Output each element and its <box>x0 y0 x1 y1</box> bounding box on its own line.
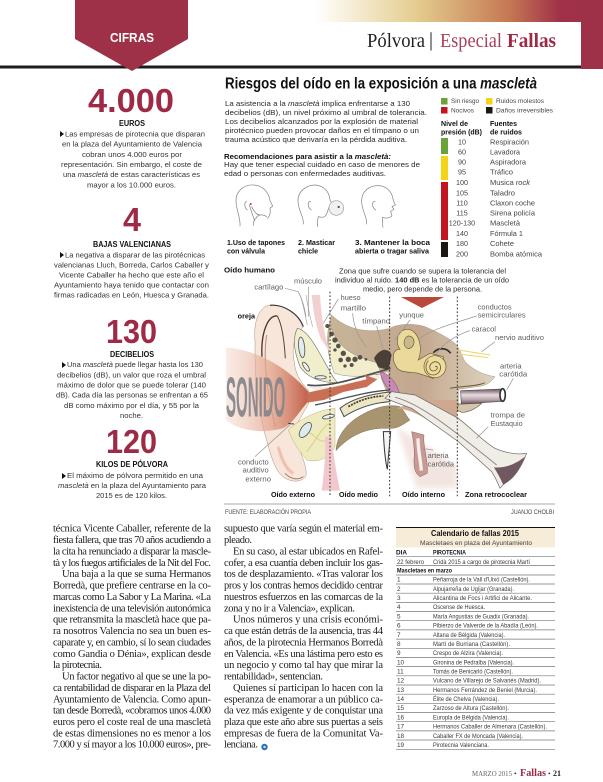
legend: Nocivos <box>451 108 475 114</box>
page footer: MARZO 2015 <box>472 769 512 778</box>
table day column: 10 <box>397 659 405 666</box>
table day column: 5 <box>397 613 401 620</box>
article column 2: lenciana. <box>224 740 258 751</box>
table header row: DIA <box>396 551 408 557</box>
article column 2: zona y no ir a Valencia», explican. <box>224 603 355 614</box>
figure: 4.000 euros: una mascletà de estas características es <box>63 170 200 179</box>
table day column: 2 <box>397 586 401 593</box>
table: noise levels: Lavadora <box>490 148 520 156</box>
table rules <box>396 556 555 749</box>
table day column: 6 <box>397 623 401 630</box>
page footer: • <box>514 769 517 778</box>
figure: 4.000 euros: mayor a los 10.000 euros. <box>87 180 176 190</box>
article column 1: caparate y, en cambio, sí lo sean ciudades <box>53 637 211 648</box>
article column 1: tan desde Borredà, «cobramos unos 4.000 <box>53 706 211 717</box>
recommendations text <box>224 152 420 178</box>
anatomy labels: caracol <box>472 324 496 333</box>
figure: 120 kilos de pólvora: El máximo de pólvora permitido en una <box>67 471 204 480</box>
section tab: cifras <box>75 0 188 71</box>
captions for the three recommendations <box>227 238 431 256</box>
figure: 130 decibelios: DECIBELIOS <box>110 350 155 359</box>
eustachian tube <box>385 392 527 488</box>
captions for the three recommendations: chicle <box>298 246 318 256</box>
note: tolerance zone: individuo al ruido. 140 dB es la tolerancia de un oído <box>335 275 509 284</box>
table: noise levels: Cohete <box>490 239 514 248</box>
anatomy labels: yunque <box>399 310 424 319</box>
illustration: human ear cross-section <box>226 276 544 497</box>
table company column: Élite de Chelva (Valencia). <box>433 694 499 703</box>
table company column: Alicantina de Focs i Artifici de Alicante. <box>433 595 532 602</box>
table heading: Mascletaes en plaza del Ayuntamiento <box>420 540 532 547</box>
zone labels: Oído externo <box>271 490 315 499</box>
table company column: Oscense de Huesca. <box>433 604 485 611</box>
article column 1: Un factor negativo al que se une la po- <box>62 672 212 682</box>
captions for the three recommendations: 2. Masticar <box>298 238 335 247</box>
table heading: Calendario de fallas 2015 <box>431 529 519 538</box>
table header row <box>396 551 467 575</box>
intro text: trauma acústico que derivaría en la pérdida auditiva. <box>225 135 407 144</box>
table company column: Altana de Bélgida (Valencia). <box>433 632 505 639</box>
article column 1: marcas como La Sabor y La Marina. «La <box>53 592 211 603</box>
article column 2: cofer, a esa cuantía deben incluir los gas- <box>224 558 384 569</box>
figure: 130 decibelios: dB como máximo por el día, y 55 por la <box>64 401 200 410</box>
figure: 130 decibelios: decibelios (dB), un valor que roza el umbral <box>57 370 206 379</box>
table: noise levels: Fórmula 1 <box>490 229 523 238</box>
figure: 130 decibelios: dB). Cada día las personas se enfrentan a 65 <box>56 391 208 400</box>
article column 2: ca que están detrás de la ausencia, tras 44 <box>224 626 384 637</box>
article column 2: en Valencia. «Es una lástima pero esto es <box>224 649 383 660</box>
intro text: decibelios (dB), un nivel próximo al umbral de tolerancia. <box>225 108 427 117</box>
figure: 4.000 euros: cobran unos 4.000 euros por <box>82 150 182 159</box>
article column 1: Una baja a la que se suma Hermanos <box>62 569 211 580</box>
table: noise levels: 95 <box>458 168 466 177</box>
anatomy labels: nervio auditivo <box>495 333 544 342</box>
page footer: 21 <box>553 769 561 778</box>
table: noise levels: Bomba atómica <box>490 249 542 258</box>
table day column: 16 <box>397 714 405 721</box>
header bar <box>0 0 603 69</box>
article column 1: euros pero el coste real de una mascletà <box>53 717 211 728</box>
article column 1: de estas dimensiones no es menor a los <box>53 728 211 739</box>
icon: head with ear plug <box>236 185 273 226</box>
figure: 4.000 euros <box>60 82 205 190</box>
table: noise levels: 140 <box>456 229 468 238</box>
table company column: Tomás de Benicarló (Castellón). <box>433 668 513 676</box>
figure: 4.000 euros: Las empresas de pirotecnia que disparan <box>65 130 205 138</box>
table: noise levels: Nivel de <box>441 119 468 128</box>
table company column: Caballer FX de Moncada (Valencia). <box>433 733 523 740</box>
article column 2: rentabilidad», sentencian. <box>224 672 323 682</box>
table company column: Cridà 2015 a cargo de pirotecnia Martí <box>433 559 530 566</box>
zone labels <box>271 490 527 499</box>
table day column: 7 <box>397 632 401 639</box>
table: noise levels <box>441 119 542 258</box>
table day column: 9 <box>397 650 401 657</box>
article column 1: fiesta fallera, que tras 70 años acudiendo a <box>53 535 211 546</box>
table company column: Alpujarreña de Ugíjar (Granada). <box>433 586 514 593</box>
article column 2: pros y los contras hemos decidido centrar <box>224 581 384 592</box>
anatomy labels <box>238 276 544 483</box>
temporal bone <box>328 315 495 488</box>
arrow: tolerance zone pointer <box>401 297 444 308</box>
article column 2: empresas de fuera de la Comunitat Va- <box>224 728 384 739</box>
anatomy labels: carótida <box>499 369 528 378</box>
anatomy labels: arteria <box>428 451 450 460</box>
table: noise levels: Taladro <box>490 188 515 197</box>
figure: 4 bajas valencianas: 4 <box>123 201 142 238</box>
intro text: Los decibelios alcanzados por la explosión de material <box>225 117 418 126</box>
table: noise levels: Mascletà <box>490 219 520 228</box>
table header row: PIROTECNIA <box>433 551 467 557</box>
anatomy labels: semicirculares <box>478 311 526 320</box>
article column 1: la cita ha renunciado a disparar la mascle- <box>53 546 212 557</box>
anatomy labels: carótida <box>428 460 455 469</box>
legend: Sin riesgo <box>451 98 479 105</box>
figure: 120 kilos de pólvora: mascletà en la plaza del Ayuntamiento para <box>58 481 207 490</box>
figure: 130 decibelios: noche. <box>120 411 143 420</box>
article column 2: Unos números y una crisis económi- <box>233 615 384 626</box>
figure: 130 decibelios: 130 <box>106 313 157 350</box>
table: noise levels: Respiración <box>490 138 529 146</box>
figure: 120 kilos de pólvora: KILOS DE PÓLVORA <box>96 460 168 469</box>
table: noise levels: 100 <box>456 178 468 187</box>
anatomy labels: Eustaquio <box>491 419 523 428</box>
article column 2: supuesto que varía según el material em- <box>224 524 384 535</box>
table company column <box>433 559 547 749</box>
intro text <box>225 99 427 144</box>
zone labels: Oído medio <box>339 490 378 499</box>
article column 1: Borredà, que prefiere centrarse en la co- <box>53 581 212 592</box>
article column 2: Quienes sí participan lo hacen con la <box>233 683 383 694</box>
note: tolerance zone: Zona que sufre cuando se supera la tolerancia del <box>339 266 506 276</box>
icon: head chewing gum <box>298 185 344 227</box>
note: tolerance zone: medio, pero depende de la persona. <box>363 284 482 293</box>
article column 1: tà y los fuegos artificiales de la Nit del Foc. <box>53 558 211 569</box>
article column 1: Ayuntamiento de Valencia. Como apun- <box>53 694 212 705</box>
source credits <box>224 504 555 516</box>
intro text: La asistencia a la mascletà implica enfrentarse a 130 <box>225 99 410 108</box>
spongy bone <box>325 324 367 368</box>
figure: 4.000 euros: en la plaza del Ayuntamiento de Valencia <box>62 140 203 149</box>
source credits: JUANJO CHOLBI <box>511 510 554 516</box>
anatomy labels: músculo <box>294 276 322 285</box>
page footer: Fallas <box>520 768 546 779</box>
table: noise levels: 60 <box>458 148 466 156</box>
figure: 130 decibelios <box>56 313 208 420</box>
figure: 4.000 euros: 4.000 <box>88 82 174 119</box>
figure: 4 bajas valencianas <box>54 201 209 300</box>
table: noise levels: 90 <box>458 158 466 167</box>
recommendations text: edad o personas con enfermedades auditivas. <box>224 169 386 178</box>
article column 2: nuestros esfuerzos en las comarcas de la <box>224 592 383 603</box>
icon: end mark <box>261 744 268 750</box>
table company column: Peñarroja de la Vall d'Uixó (Castellón). <box>433 577 530 584</box>
table: noise levels: 115 <box>456 209 468 218</box>
table company column: María Angustias de Guadix (Granada). <box>433 613 529 620</box>
article column 1: que retransmita la mascletà hace que pa- <box>53 615 212 626</box>
table company column: Vulcano de Villarejo de Salvanés (Madrid). <box>433 678 541 685</box>
figure: 130 decibelios: Una mascletà puede llegar hasta los 130 <box>67 360 203 369</box>
table company column: Europla de Bélgida (Valencia). <box>433 714 509 721</box>
table day column: 19 <box>397 742 405 749</box>
table company column: Hermanos Caballer de Almenara (Castellón). <box>433 724 547 731</box>
table heading <box>396 527 555 548</box>
table day column: 1 <box>397 577 401 584</box>
anatomy labels: auditivo <box>243 466 269 475</box>
table: noise levels: 10 <box>458 138 466 146</box>
table company column: Crespo de Alzira (Valencia). <box>433 650 503 657</box>
infographic title: Riesgos del oído en la exposición a una mascletà <box>225 76 537 92</box>
note: tolerance zone <box>335 266 509 293</box>
anatomy labels: trompa de <box>491 410 525 419</box>
section heading: Pólvora <box>367 30 425 52</box>
figure: 120 kilos de pólvora <box>58 423 207 500</box>
article column 1: como Gandia o Dénia», explican desde <box>53 649 211 660</box>
section heading: | <box>429 29 433 51</box>
illustration: human ear cross-section: SONIDO <box>226 367 285 430</box>
article column 2: da vez más exigente y de conquistar una <box>224 706 383 717</box>
table company column: Pibierzo de Valverde de la Abadía (León). <box>433 623 538 630</box>
figure: 4 bajas valencianas: Vicente Caballer ha hecho que este año el <box>59 270 204 279</box>
table: noise levels: Fuentes <box>490 119 517 128</box>
article column 2: pleado. <box>224 535 252 546</box>
figure: 120 kilos de pólvora: 2015 es de 120 kilos. <box>96 491 167 500</box>
figure: 120 kilos de pólvora: 120 <box>106 423 157 460</box>
section heading: Fallas <box>507 30 556 52</box>
table: noise levels: 110 <box>456 198 468 207</box>
anatomy labels: oreja <box>238 312 256 321</box>
table day column: 22 febrero <box>397 559 424 566</box>
article column 1 <box>53 524 212 751</box>
table day column: 3 <box>397 595 401 602</box>
section tab: cifras: CIFRAS <box>110 31 154 45</box>
article column 2 <box>224 524 384 751</box>
section heading: Especial <box>440 30 502 52</box>
figure: 4 bajas valencianas: La negativa a disparar de las pirotécnicas <box>65 250 205 259</box>
article column 1: ca rentabilidad de disparar en la Plaza del <box>53 683 211 694</box>
table day column: 8 <box>397 641 401 648</box>
page footer <box>472 768 561 779</box>
figure: 4 bajas valencianas: valencianas Lluch, Borreda, Carlos Caballer y <box>54 260 209 269</box>
anatomy labels: tímpano <box>362 316 390 325</box>
captions for the three recommendations: 3. Mantener la boca <box>355 238 431 247</box>
anatomy labels: cartílago <box>254 282 283 291</box>
inner ear: semicircular canals and cochlea <box>393 329 490 378</box>
section heading <box>367 29 556 52</box>
legend <box>441 98 554 114</box>
table day column: 14 <box>397 696 405 703</box>
carotid artery tubes <box>383 389 505 477</box>
anatomy labels: externo <box>245 474 271 483</box>
article column 2: En su caso, al estar ubicados en Rafel- <box>233 546 384 557</box>
table day column: 12 <box>397 678 405 685</box>
article column 2: años, de la pirotecnia Hermanos Borredà <box>224 637 383 648</box>
table day column: 15 <box>397 705 405 712</box>
table day column: 13 <box>397 687 405 694</box>
table header row: Mascletaes en marzo <box>397 569 452 575</box>
figure: 4.000 euros: representación. Sin embargo, el coste de <box>61 160 202 169</box>
article column 1: 7.000 y sí mayor a los 10.000 euros», pre- <box>53 740 212 751</box>
table: noise levels: Aspiradora <box>490 158 526 167</box>
table: noise levels: 200 <box>456 249 468 258</box>
article column 2: tos de desplazamiento. «Tras valorar los <box>224 569 383 580</box>
table company column: Gironina de Pedralba (Valencia). <box>433 659 514 666</box>
captions for the three recommendations: 1.Uso de tapones <box>227 238 285 247</box>
article column 1: ra nosotros Valencia no sea un buen es- <box>53 626 212 637</box>
heading: oido humano: Oído humano <box>224 266 276 275</box>
captions for the three recommendations: abierta o tragar saliva <box>355 246 430 256</box>
recommendations text: Recomendaciones para asistir a la mascletà: <box>224 152 392 161</box>
outer ear <box>255 305 308 481</box>
figure: 4 bajas valencianas: BAJAS VALENCIANAS <box>93 240 172 249</box>
anatomy labels: conducto <box>238 457 269 466</box>
middle ear ossicles and eardrum <box>374 350 399 394</box>
table company column: Zarzoso de Altura (Castellón). <box>433 705 509 712</box>
legend: Daños irreversibles <box>496 108 554 114</box>
ear canal and sound arrow <box>226 347 391 431</box>
anatomy labels: arteria <box>500 361 523 370</box>
zone labels: Zona retrococlear <box>465 490 527 499</box>
table: noise levels: presión (dB) <box>441 128 482 136</box>
leader lines <box>255 287 513 457</box>
icon: head with open mouth <box>362 186 395 227</box>
page footer: • <box>548 769 551 778</box>
table company column: Hermanos Ferrández de Beniel (Murcia). <box>433 687 537 694</box>
captions for the three recommendations: con válvula <box>227 246 266 256</box>
recommendations text: Hay que tener especial cuidado en caso de menores de <box>224 160 420 169</box>
zone dividers <box>330 292 457 497</box>
table: calendario de fallas 2015 <box>396 527 555 749</box>
figure: 4.000 euros: EUROS <box>119 119 146 128</box>
article column 2: esperanza de enamorar a un público ca- <box>224 694 384 705</box>
article column 1: la pirotecnia. <box>53 660 102 671</box>
table day column: 11 <box>397 668 404 676</box>
figure: 4 bajas valencianas: firmas radicadas en León, Huesca y Granada. <box>54 290 209 300</box>
table: noise levels: Sirena policía <box>490 209 535 218</box>
table day column: 4 <box>397 604 401 611</box>
table: noise levels: de ruidos <box>490 128 522 136</box>
anatomy labels: martillo <box>341 304 366 313</box>
table: noise levels: 105 <box>456 188 468 197</box>
table company column: Pirotecnia Valenciana. <box>433 742 489 749</box>
table day column: 18 <box>397 733 405 740</box>
anatomy labels: hueso <box>341 293 361 302</box>
table: noise levels: 120-130 <box>449 219 475 228</box>
table day column <box>397 559 424 749</box>
article column 1: técnica Vicente Caballer, referente de la <box>53 524 211 535</box>
intro text: pirotécnico pueden provocar daños en el tímpano o un <box>225 126 419 135</box>
article column 2: plaza que este año abre sus puertas a seis <box>224 717 383 728</box>
figure: 130 decibelios: máximo de dolor que se puede tolerar (140 <box>57 380 206 389</box>
table: noise levels: 180 <box>456 239 468 248</box>
table day column: 17 <box>397 724 405 731</box>
source credits: FUENTE: ELABORACIÓN PROPIA <box>225 509 311 516</box>
figure: 4 bajas valencianas: Ayuntamiento haya tenido que contactar con <box>54 280 209 289</box>
legend: Ruidos molestos <box>496 98 545 105</box>
anatomy labels: conductos <box>478 302 512 311</box>
icons: three heads <box>236 185 395 227</box>
muscle and cartilage <box>288 295 340 491</box>
table: noise levels: Musica rock <box>490 178 530 187</box>
article column 2: un negocio y como tal hay que mirar la <box>224 660 383 671</box>
zone labels: Oído interno <box>402 490 445 499</box>
table: noise levels: Claxon coche <box>490 198 535 207</box>
table: noise levels: Tráfico <box>490 168 513 177</box>
article column 1: inexistencia de una televisión autonómica <box>53 603 211 614</box>
table company column: Martí de Burriana (Castellón). <box>433 641 510 648</box>
